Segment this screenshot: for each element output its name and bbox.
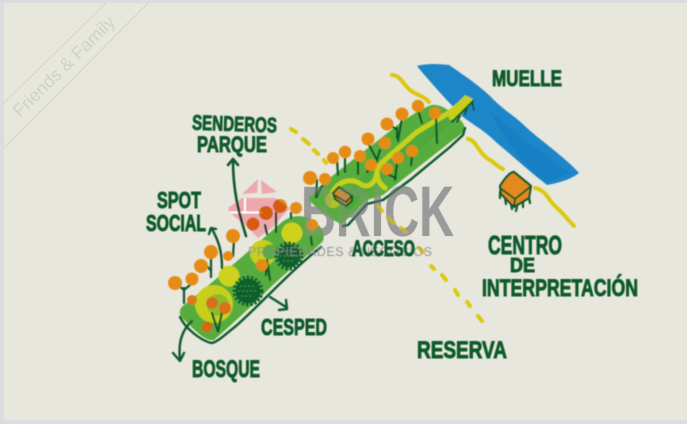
arrow: cesped <box>270 297 287 310</box>
orange interpretation centre building <box>500 172 531 211</box>
label: parque: PARQUE <box>197 132 267 157</box>
river: dark tone <box>490 112 570 183</box>
path blob <box>325 192 341 208</box>
yellow ring <box>250 240 276 266</box>
watermark: BRICK overlay and house icon <box>228 173 454 259</box>
yellow shoreline <box>392 75 429 102</box>
label: reserva: RESERVA <box>417 337 507 364</box>
trees <box>168 199 318 332</box>
label: social: SOCIAL <box>146 210 206 236</box>
building <box>333 187 352 206</box>
label: bosque: BOSQUE <box>192 356 260 383</box>
label: muelle: MUELLE <box>492 66 562 91</box>
strip outline <box>180 247 321 343</box>
strip base <box>180 216 324 340</box>
ring centre <box>262 244 278 260</box>
label: acceso: ACCESO <box>352 236 415 261</box>
pier <box>447 95 473 120</box>
label: senderos: SENDEROS <box>192 112 277 137</box>
river: blue water <box>417 64 579 185</box>
yellow dashed reserve line <box>291 75 574 321</box>
label: de: DE <box>510 255 535 277</box>
watermark wordmark overlay: BRICK <box>301 173 454 252</box>
yellow clearing ring <box>195 285 233 323</box>
footpath <box>331 99 466 196</box>
upper green strip <box>303 95 474 226</box>
clearing centre <box>207 294 229 316</box>
labels <box>146 66 638 383</box>
strip tone <box>342 118 452 220</box>
corner ribbon: Friends & Family: Friends & Family <box>9 12 119 121</box>
watermark house icon <box>228 179 290 238</box>
lower green strip <box>168 199 324 343</box>
label: cesped: CESPED <box>261 314 327 340</box>
dark shrub right <box>276 243 302 269</box>
trees <box>303 100 441 198</box>
dark shrub left <box>234 277 262 305</box>
strip outline <box>343 128 465 226</box>
strip base <box>308 105 464 224</box>
arrow: spot social <box>209 228 222 268</box>
yellow clearing <box>218 266 240 286</box>
arrow: bosque <box>173 321 192 361</box>
yellow clearing right <box>282 222 302 244</box>
watermark tagline: PROPIEDADES & NEGOCIOS <box>248 245 432 259</box>
arrow: senderos parque <box>228 159 246 236</box>
watermark: BRICK wordmark: BRICK <box>301 173 454 252</box>
corner ribbon: Friends & Family <box>4 3 148 148</box>
label: centro: CENTRO <box>488 230 562 260</box>
label: spot: SPOT <box>157 187 201 213</box>
